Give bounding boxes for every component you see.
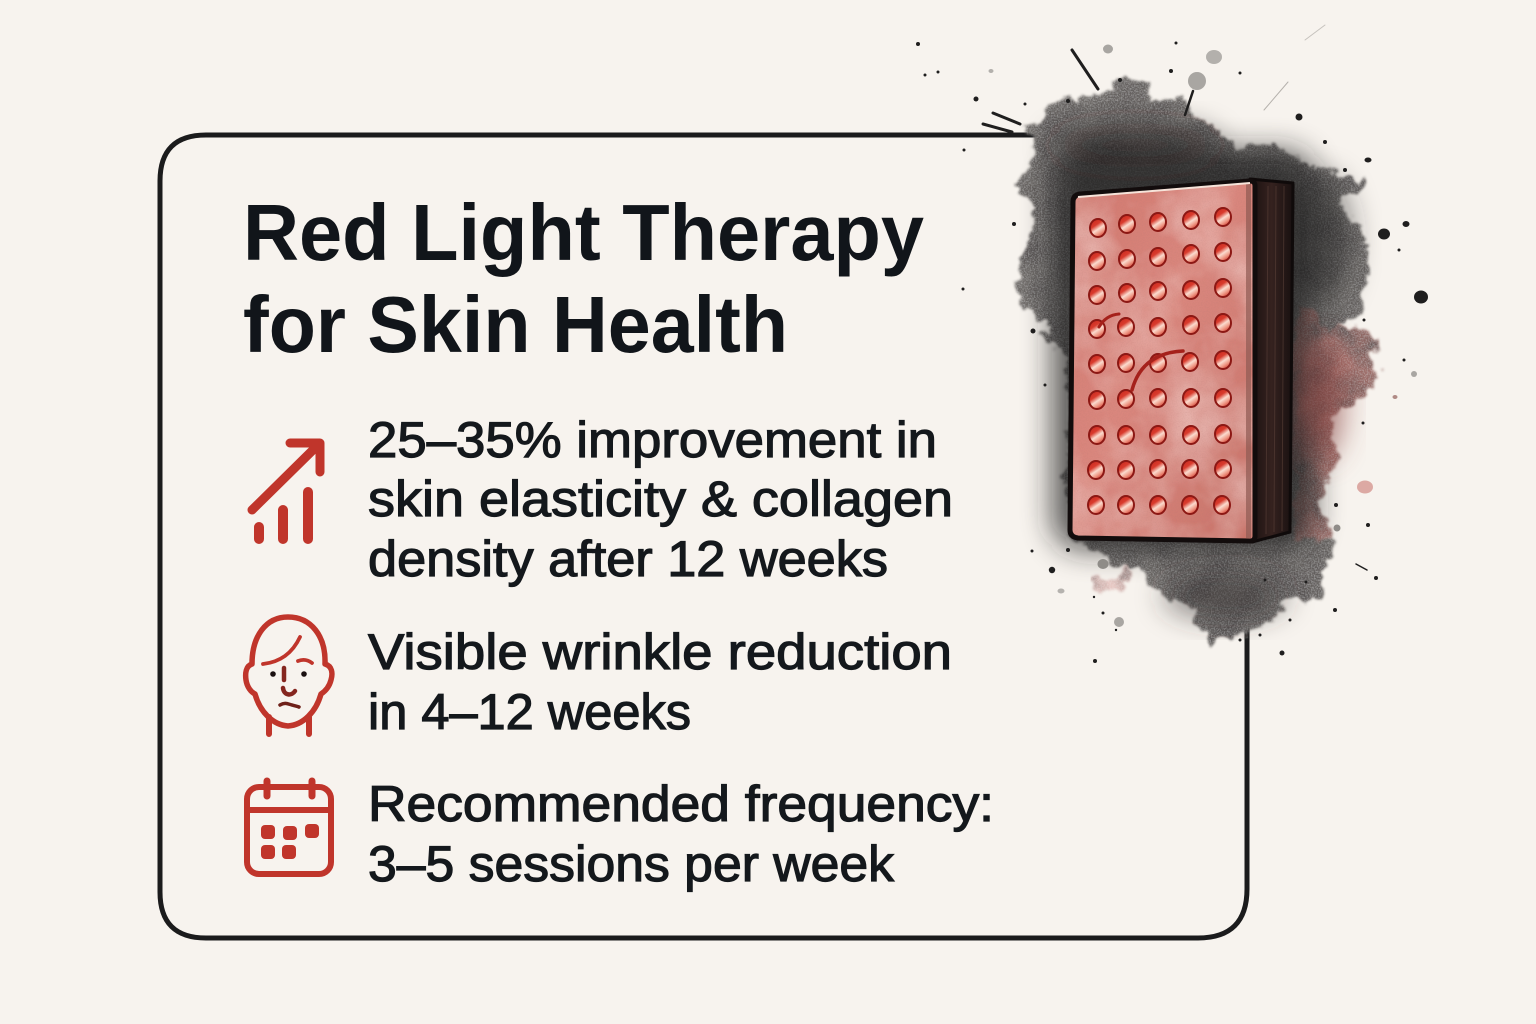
ink spikes <box>983 25 1367 570</box>
text: elasticity stat: density after 12 weeks <box>368 531 888 587</box>
text: wrinkle reduction: Visible wrinkle reduction <box>368 624 952 680</box>
title: for Skin Health <box>243 280 788 369</box>
ink specks <box>916 42 1428 663</box>
icon: calendar <box>247 781 331 874</box>
device front face <box>1070 181 1255 541</box>
ink splatter <box>916 25 1428 663</box>
text: recommended frequency <box>368 776 994 892</box>
ink wash: red blob <box>1295 305 1377 545</box>
grey and pink droplets <box>988 44 1417 627</box>
text: elasticity stat: 25–35% improvement in <box>368 412 937 468</box>
pink splash <box>1098 565 1128 592</box>
device side ridges <box>1266 186 1284 534</box>
ink wash: dark core <box>1052 150 1314 550</box>
text: recommended frequency: 3–5 sessions per week <box>368 836 895 892</box>
top highlight <box>1078 183 1250 197</box>
icon: face with wrinkles <box>246 617 332 734</box>
device: red light therapy panel <box>1070 179 1293 542</box>
title: Red Light Therapy <box>243 188 924 277</box>
text: elasticity stat: skin elasticity & collagen <box>368 471 953 527</box>
text: elasticity stat <box>368 412 953 587</box>
text: wrinkle reduction: in 4–12 weeks <box>368 684 691 740</box>
title <box>243 188 924 369</box>
text: wrinkle reduction <box>368 624 952 740</box>
text: recommended frequency: Recommended frequency: <box>368 776 994 832</box>
ink wash: red tint <box>1300 340 1344 460</box>
ink wash: lower shadow <box>1163 574 1287 618</box>
icon: rising bar chart with arrow <box>252 443 320 539</box>
ink wash: grey blob <box>1013 87 1372 652</box>
device bevel <box>1246 184 1251 538</box>
device front outline <box>1070 181 1255 541</box>
ink wash: top shadow <box>1050 123 1220 167</box>
LED grid <box>1088 208 1231 514</box>
rounded frame <box>160 135 1247 938</box>
ink wash: right shadow <box>1292 174 1352 306</box>
device side <box>1250 179 1293 542</box>
red wires <box>1099 314 1183 390</box>
